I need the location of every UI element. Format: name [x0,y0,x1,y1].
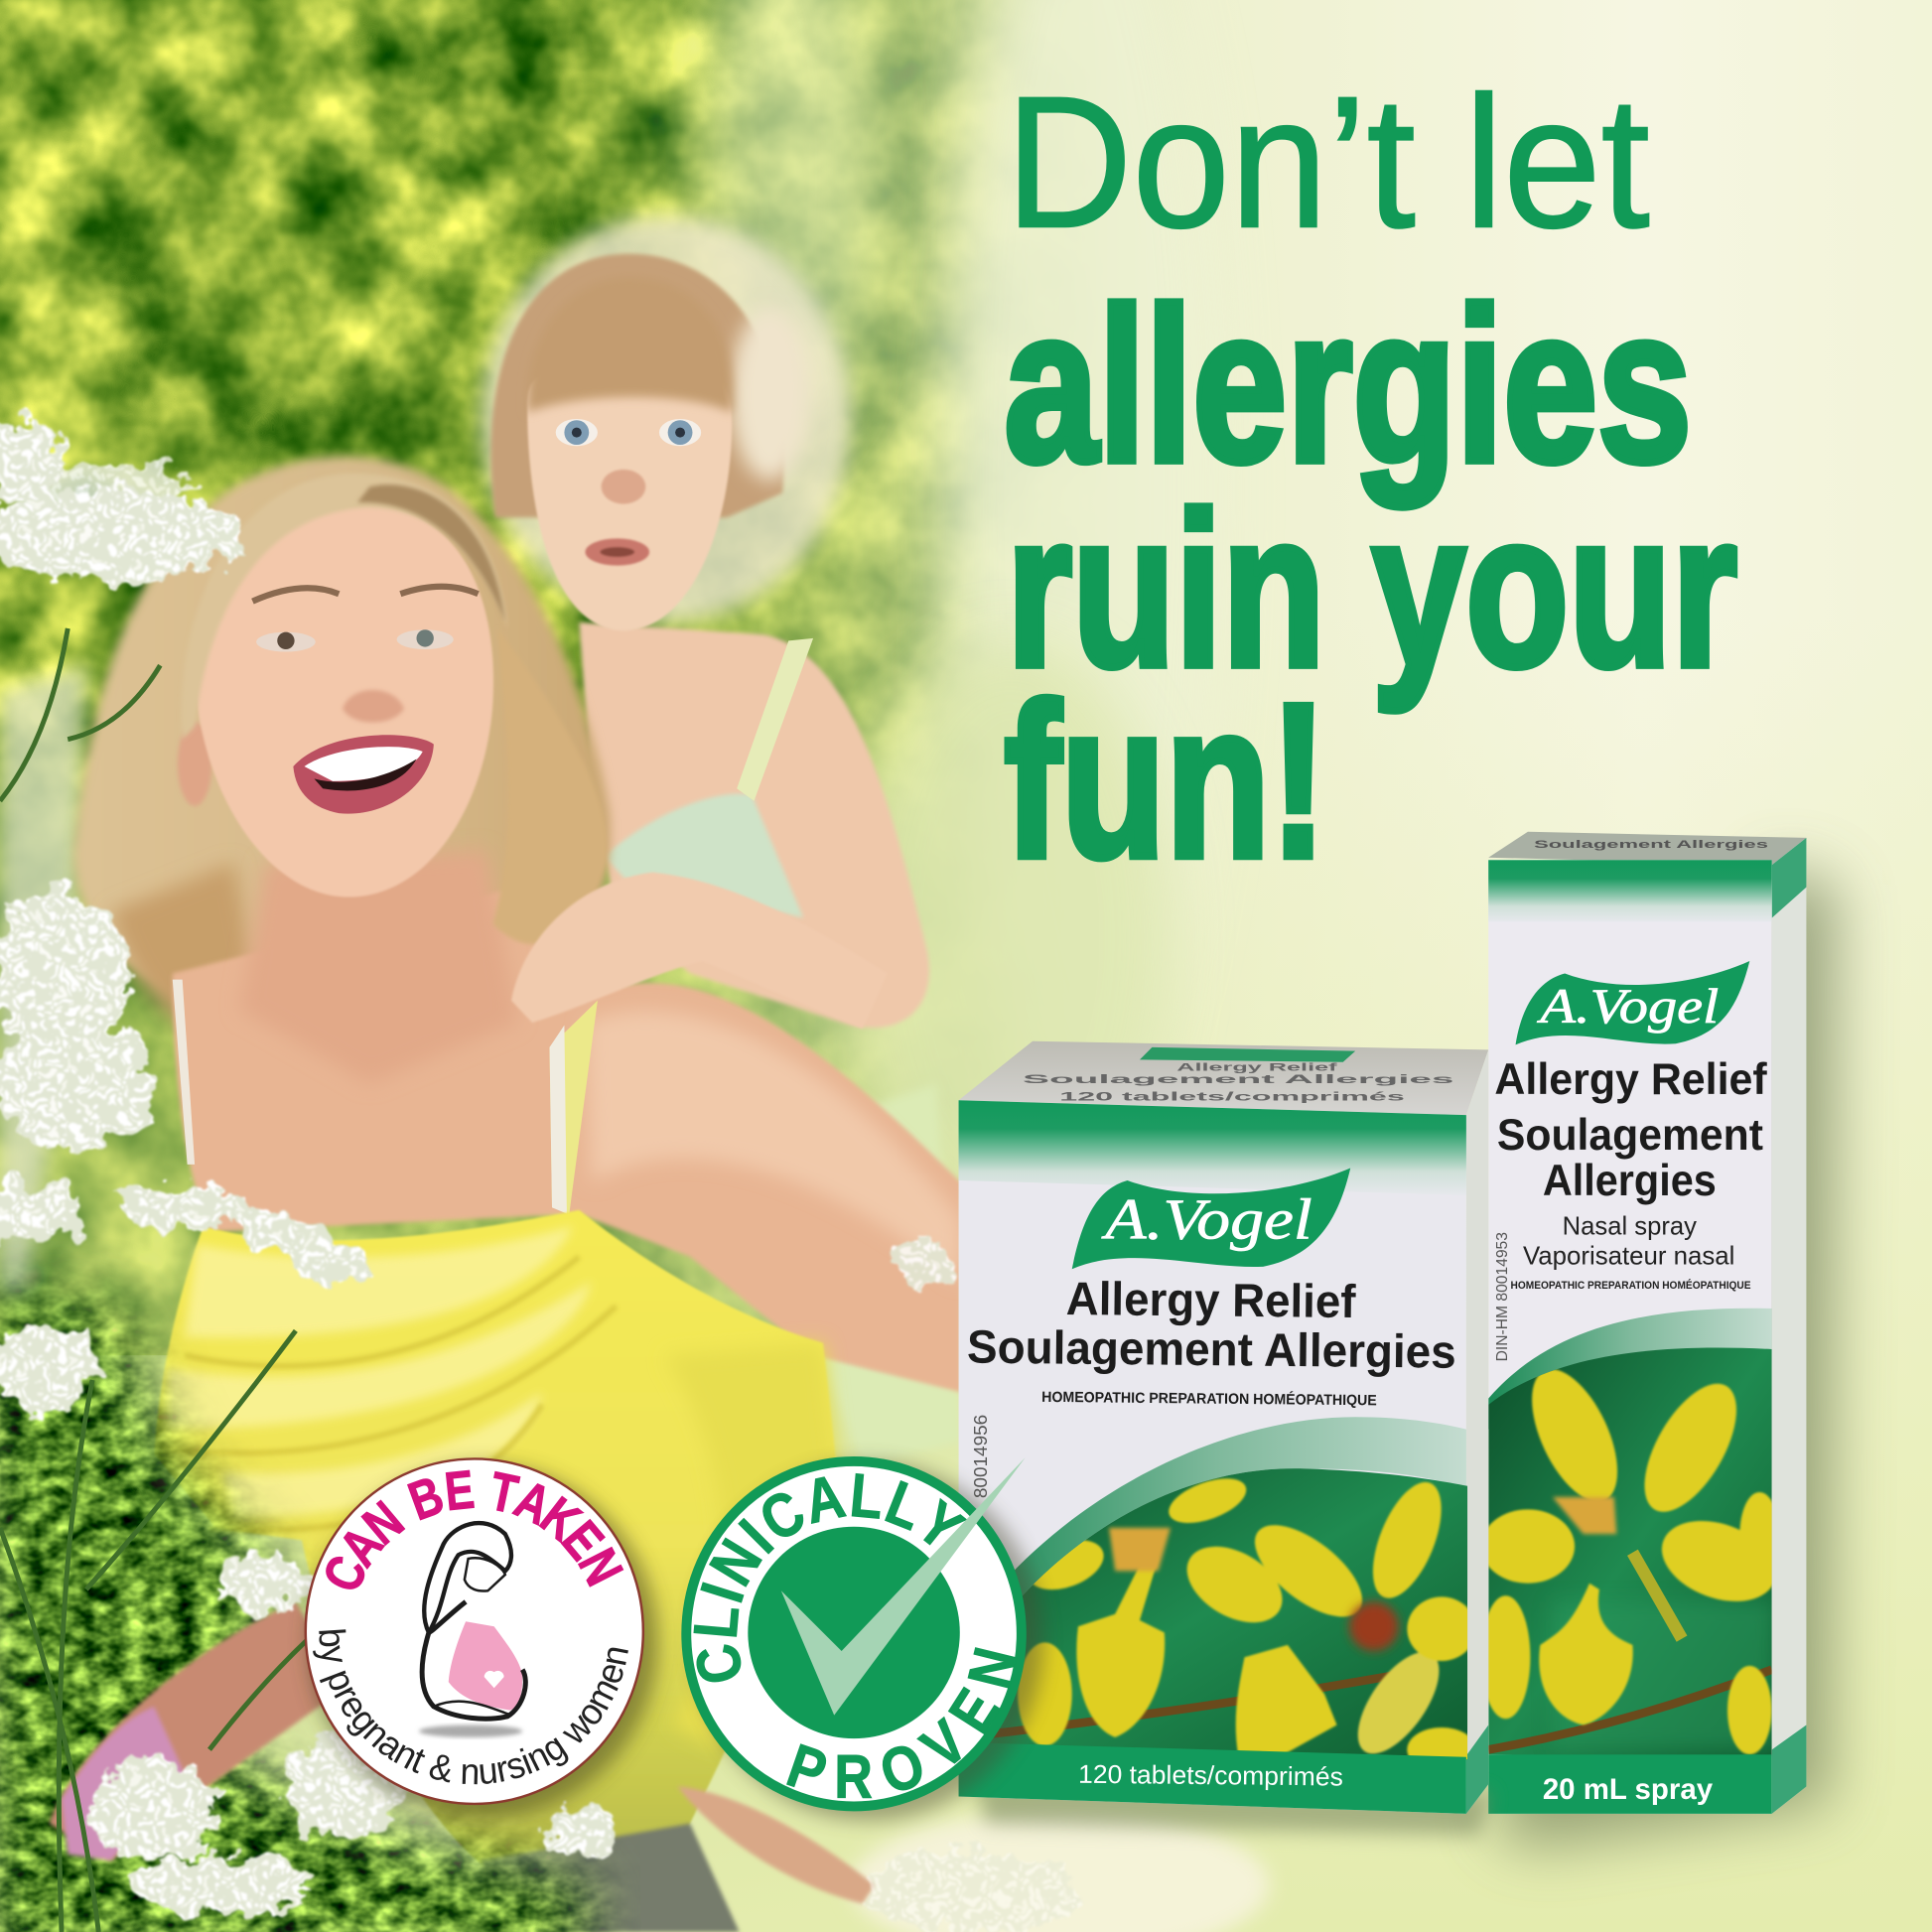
spray box front face [1488,860,1772,1814]
photo: smiling woman [73,457,961,1932]
can be taken text: T [484,1460,523,1525]
spray arc band [1488,1309,1772,1430]
tablets product name [966,1271,1457,1410]
can be taken text: E [550,1510,615,1571]
spray descriptor: Nasal spray [1563,1211,1697,1241]
can be taken text: N [352,1490,415,1557]
can be taken text: C [312,1547,379,1600]
clinically text: C [682,1638,758,1690]
badge: clinically proven [682,1457,1043,1821]
badge: can be taken by pregnant and nursing women [297,1451,669,1829]
face [195,505,493,897]
tablets count: 120 tablets/comprimés [1078,1759,1343,1792]
headline line 4: fun! [1004,658,1327,903]
flower clusters [0,489,240,583]
can be taken text: A [328,1516,395,1577]
tablets bottom band [959,1742,1466,1814]
clinically text: L [682,1603,753,1641]
clinically badge ring [686,1461,1022,1806]
white flowers and greenery [0,419,1078,1932]
clinically text: L [847,1461,886,1533]
hair lower lock [111,863,271,1059]
right hand [678,1787,875,1903]
tablets DIN number: 80014956 [970,1415,991,1498]
spray product name: Allergy Relief [1494,1055,1767,1104]
feathery foliage [0,1260,621,1932]
proven text: R [834,1743,873,1812]
spray box shadow [1491,863,1836,1849]
nose [343,690,404,723]
icon: pregnant woman [419,1523,525,1737]
tablets logo text: A.Vogel [1101,1186,1312,1251]
spray product name [1494,1055,1767,1205]
headline line 1: Don’t let [1006,57,1650,266]
clinically text: C [749,1477,817,1556]
spray descriptor: HOMEOPATHIC PREPARATION HOMÉOPATHIQUE [1511,1279,1751,1292]
proven text: E [936,1678,1013,1744]
spray bottom band [1488,1754,1772,1814]
spray box top text: Soulagement Allergies [1534,839,1768,851]
proven text: V [909,1708,980,1783]
tank top strap [550,1001,598,1213]
tablets top leaf and text [1140,1047,1355,1062]
icon: check mark [781,1457,1026,1716]
spray product name: Allergies [1543,1157,1717,1205]
child eyes [556,419,701,446]
clinically text: I [728,1507,786,1566]
clinically badge shadow [694,1461,1043,1821]
ruffle highlights [167,1226,592,1518]
pregnant badge shadow [308,1463,658,1819]
spray logo text: A.Vogel [1537,979,1719,1034]
clinically text: N [697,1529,775,1596]
spray product name: Soulagement [1497,1111,1763,1160]
spray descriptor: Vaporisateur nasal [1523,1240,1734,1270]
child dress [604,794,803,918]
tablets product name: Soulagement Allergies [967,1320,1456,1378]
spray flower photo [1481,1343,1787,1762]
product: tablets box: 120 tablets/comprimés [1059,1089,1405,1103]
headline [1004,57,1737,903]
clinically inner disc [748,1527,960,1738]
stems [0,628,369,1932]
product: tablets box [959,1041,1491,1836]
photo: child on shoulders [481,215,961,1466]
hair back [73,457,611,998]
neck [240,850,517,1084]
tablets box shadow [973,1774,1491,1836]
clinically text: A [798,1462,851,1537]
child head [527,369,732,630]
headline line 3: ruin your [1007,467,1737,712]
product: tablets box: Allergy Relief [1176,1061,1337,1073]
tablets box front face [959,1100,1466,1814]
product: tablets box: Soulagement Allergies [1023,1072,1454,1086]
spray descriptor [1511,1211,1751,1292]
headline line 2: allergies [1004,262,1692,507]
proven text: O [872,1730,933,1808]
body and shoulder [173,888,961,1392]
child torso and arm [579,622,929,1028]
smile [293,735,434,814]
child dress strap [737,638,813,801]
eyes and brows [252,587,479,652]
tablets logo leaf [1072,1169,1350,1269]
jeans [481,1824,740,1932]
by pregnant and nursing women text: by pregnant & nursing women [313,1629,628,1785]
yellow ruffled top [154,1210,838,1872]
clinically text: Y [904,1489,975,1564]
child's hand on shoulder [511,873,888,1029]
clinically text: I [688,1576,758,1610]
spray DIN number: DIN-HM 80014953 [1493,1232,1511,1361]
tablets product name: HOMEOPATHIC PREPARATION HOMÉOPATHIQUE [1041,1389,1377,1409]
child hair highlight [731,308,809,481]
tablets arc band [967,1417,1466,1657]
pregnant badge disc [306,1458,643,1804]
ear [178,722,211,806]
spray box top and side faces [1488,832,1806,865]
spray size: 20 mL spray [1543,1773,1714,1806]
clinically text: L [877,1468,932,1544]
can be taken text: A [506,1469,560,1537]
clinically text [682,1461,975,1690]
tablets flower photo [989,1468,1467,1759]
proven text: N [956,1641,1031,1695]
child hair halo [481,215,850,622]
child fringe [527,277,733,413]
bracelet [62,1707,185,1861]
can be taken text: E [442,1459,478,1522]
tablets product name: Allergy Relief [1066,1272,1356,1327]
hair front band [182,474,507,740]
can be taken text: B [401,1464,451,1532]
product: nasal spray box [1481,832,1836,1849]
can be taken text [312,1459,634,1600]
proven text [779,1641,1031,1812]
child nose and mouth [586,470,649,566]
can be taken text: K [529,1486,592,1553]
proven text: P [779,1731,835,1808]
lower left arm [50,1601,345,1861]
tablets box top face [959,1041,1488,1115]
hair parting shadow [357,484,505,622]
tablets box side face [1466,1049,1488,1814]
child hair back [490,254,784,517]
can be taken text: N [566,1540,634,1594]
spray logo leaf [1516,961,1749,1044]
